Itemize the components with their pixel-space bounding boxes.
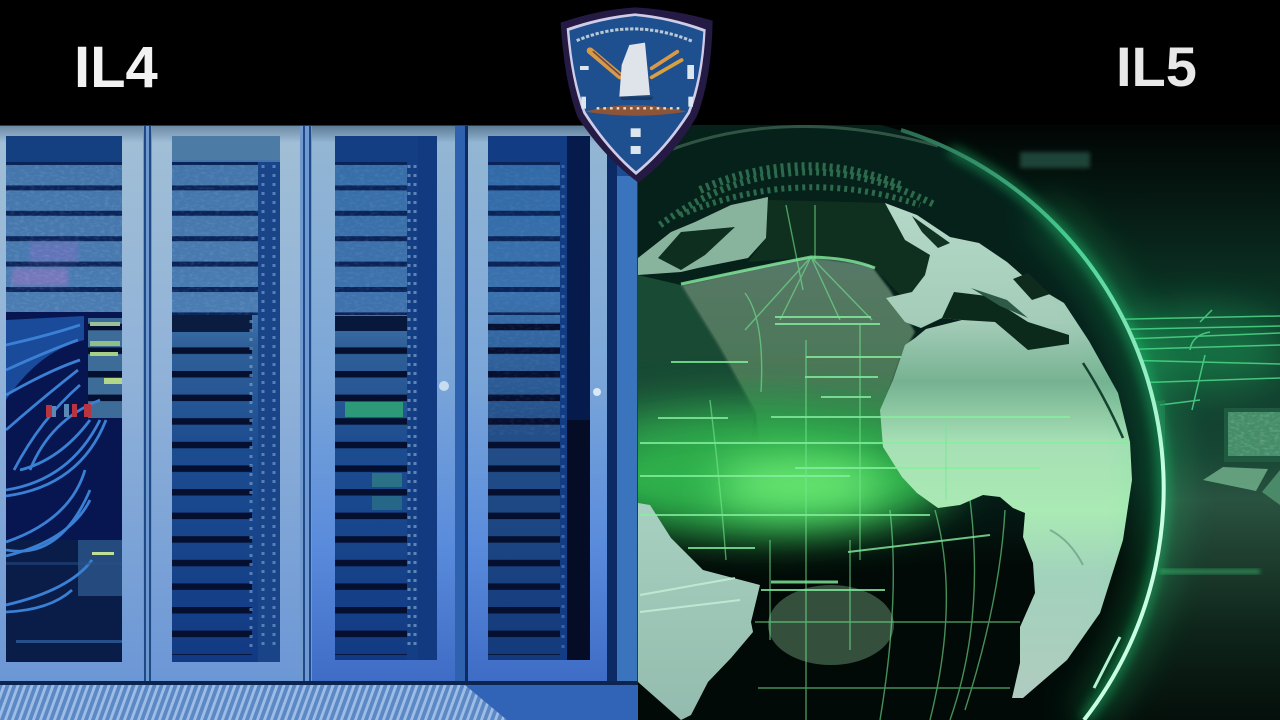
background room	[928, 137, 1280, 720]
floor grating	[0, 681, 638, 720]
dim upper ring	[670, 126, 938, 150]
badge: shield emblem	[561, 7, 713, 183]
glowing ring	[901, 130, 1164, 720]
globe base	[638, 125, 1168, 720]
emblem base	[585, 97, 687, 116]
background data lines and monitors	[1125, 310, 1280, 575]
emblem wings	[590, 51, 682, 77]
South America landmass	[638, 503, 760, 720]
network cables	[6, 312, 122, 662]
west dark land	[638, 275, 755, 445]
longitude lines	[710, 205, 1020, 720]
panel: IL4 server racks	[0, 125, 638, 720]
panel: IL5 digital globe	[570, 125, 1280, 720]
label: IL4: IL4	[74, 35, 158, 100]
rack 2	[152, 126, 312, 681]
north dark band	[748, 200, 930, 300]
rack 4	[439, 126, 617, 681]
shield body	[561, 7, 713, 183]
emblem tower	[619, 43, 650, 97]
green equator glow	[570, 400, 955, 536]
rim highlight	[1094, 637, 1120, 688]
gray south circle	[768, 585, 894, 665]
rack 5 edge	[617, 126, 637, 681]
emblem small symbols	[580, 65, 694, 154]
label: IL5: IL5	[1116, 35, 1197, 98]
top latitude grid	[660, 166, 935, 225]
emblem top lettering band	[577, 29, 693, 42]
north light land	[638, 197, 768, 275]
rack 1 with cables	[0, 126, 152, 681]
Atlantic ocean panel	[681, 257, 915, 445]
top black band	[0, 0, 1280, 126]
Europe and Africa landmass	[880, 203, 1132, 698]
globe	[638, 125, 1162, 720]
rack 3	[312, 126, 468, 681]
latitude lines	[640, 257, 1130, 612]
